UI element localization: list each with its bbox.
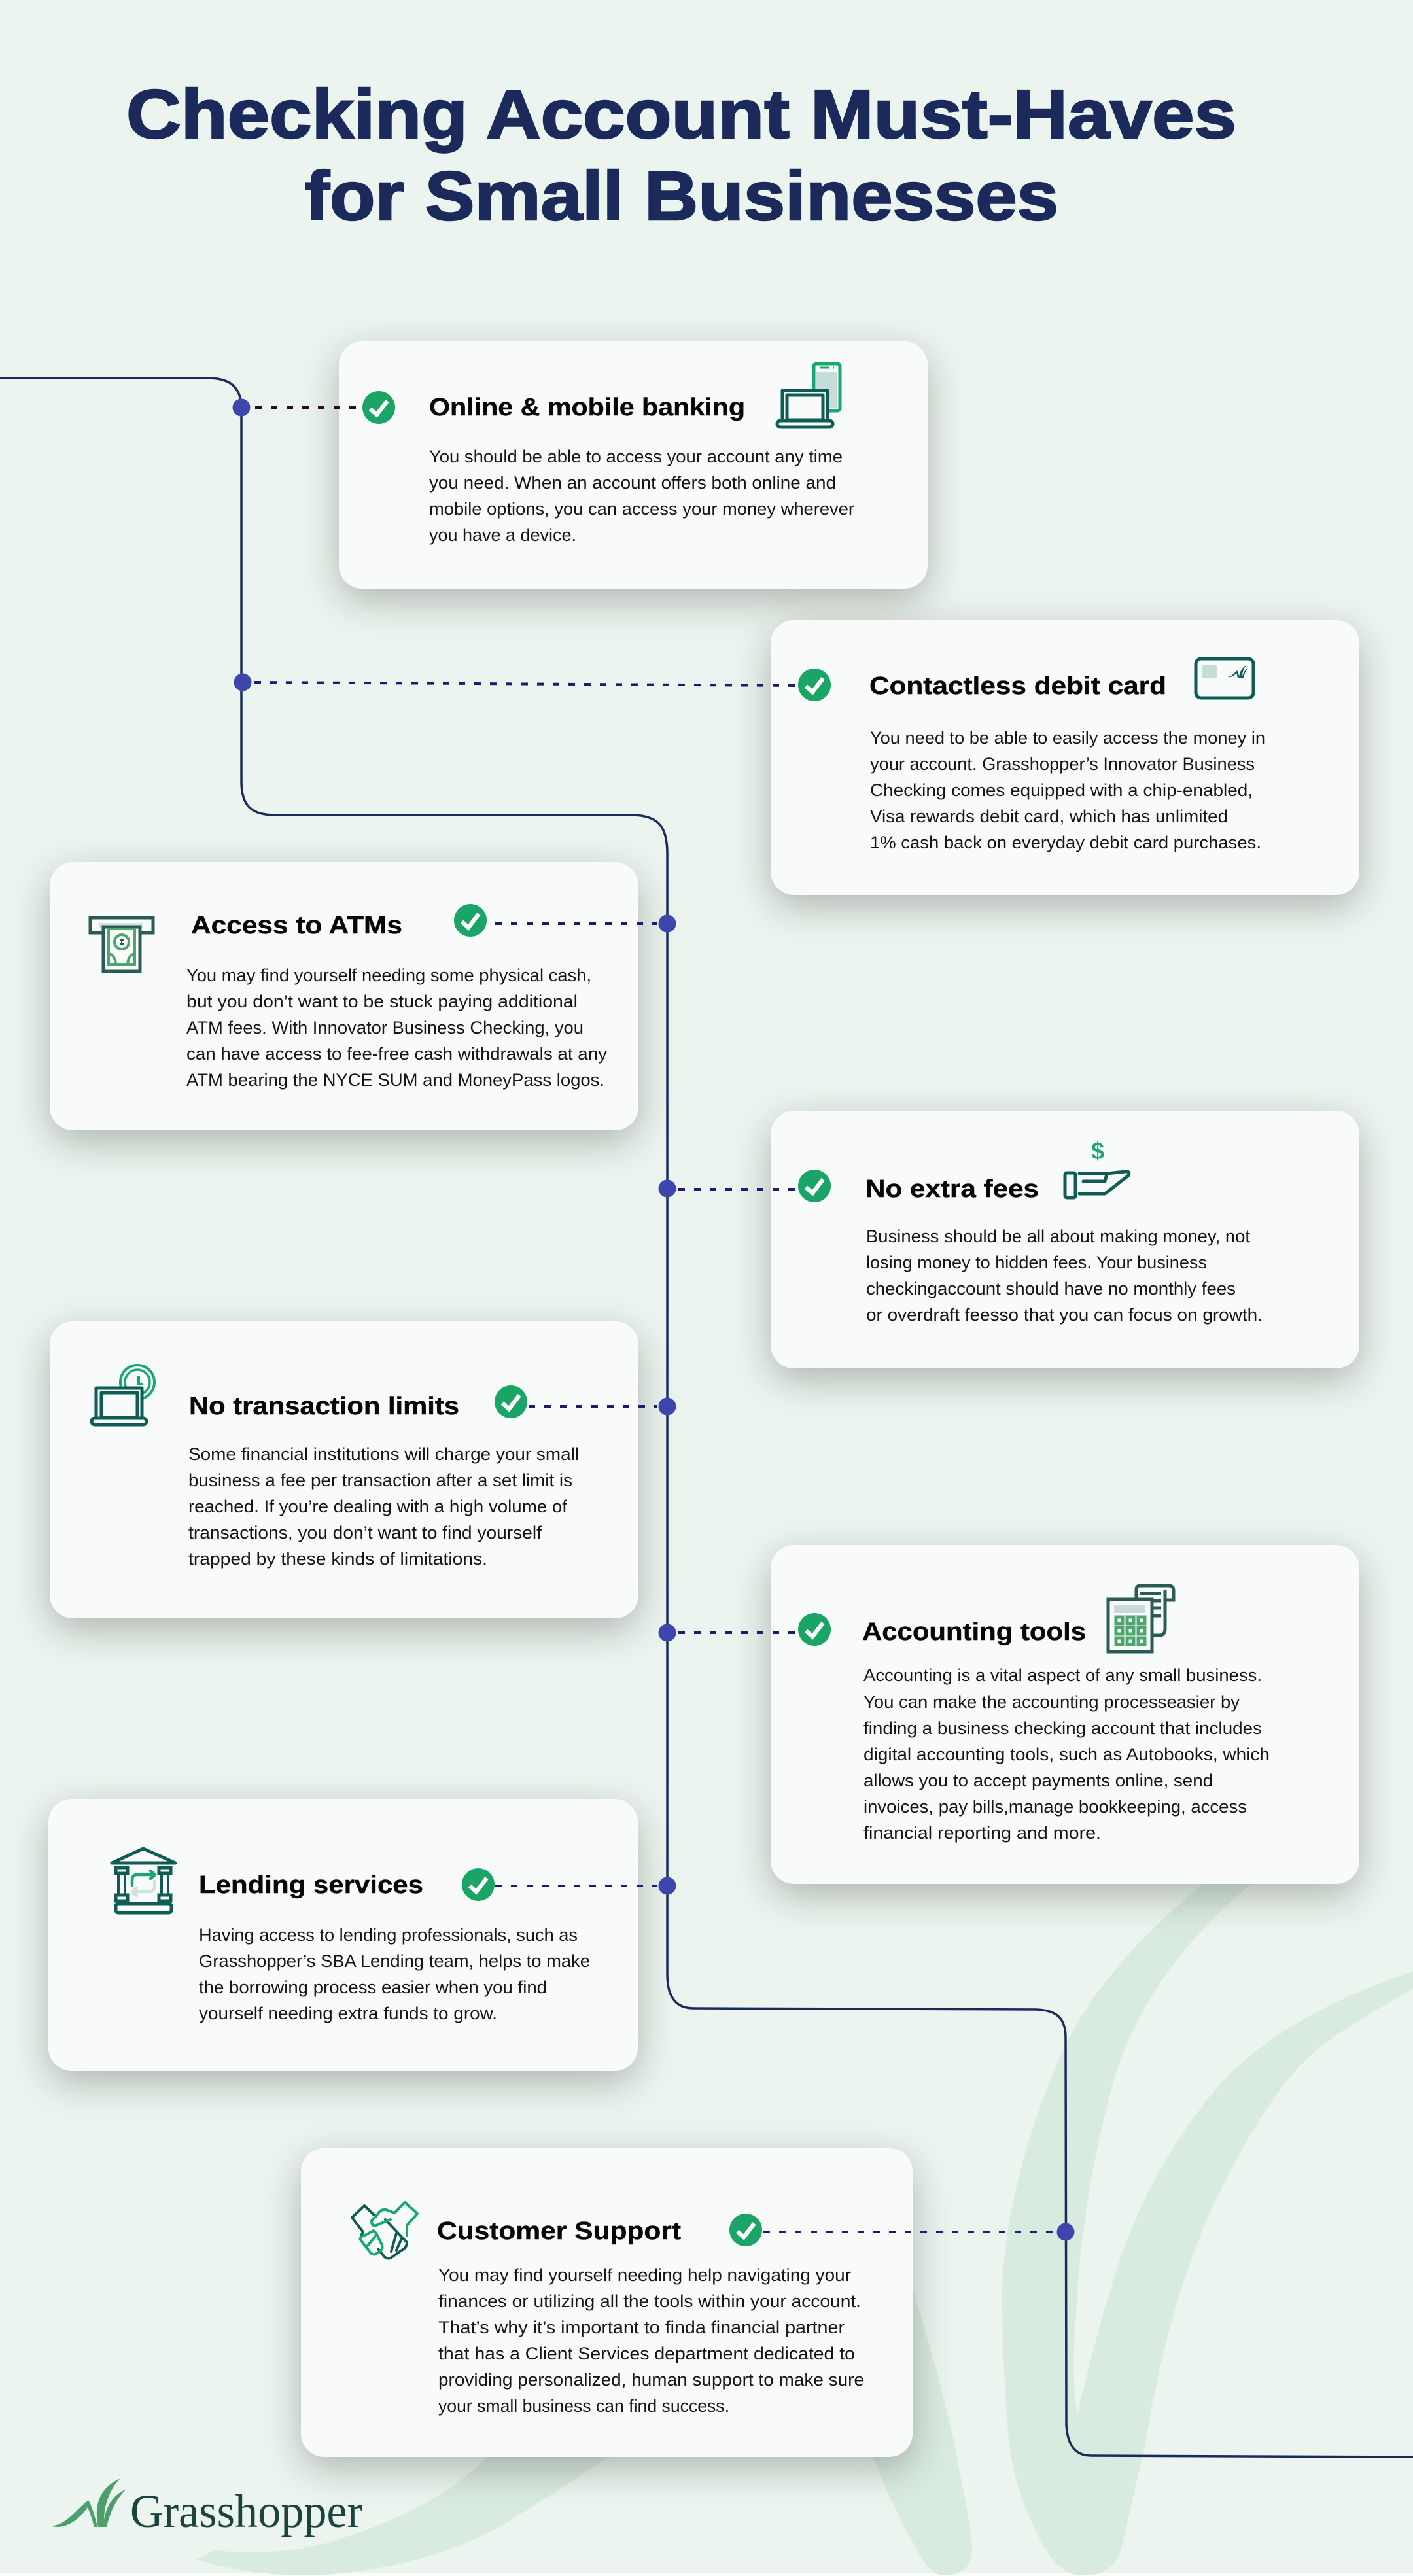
panel: lending services (48, 1799, 638, 2071)
body text: you have a device. (429, 525, 576, 545)
title: Checking Account Must-Haves (126, 76, 1236, 153)
card background (339, 341, 928, 589)
body text: or overdraft feesso that you can focus on growth. (866, 1305, 1263, 1325)
body text: financial reporting and more. (864, 1823, 1101, 1843)
body text: but you don’t want to be stuck paying additional (186, 992, 578, 1011)
body text: transactions, you don’t want to find yourself (188, 1523, 542, 1542)
heading: Access to ATMs (191, 912, 402, 939)
icon: bank building (112, 1849, 175, 1913)
body text (866, 1227, 1263, 1325)
body text: Grasshopper’s SBA Lending team, helps to make (199, 1951, 590, 1971)
check badge (729, 2214, 762, 2246)
panel: contactless debit card (771, 620, 1359, 895)
body text: trapped by these kinds of limitations. (188, 1549, 487, 1569)
icon: hand with dollar (1065, 1138, 1129, 1198)
body text: allows you to accept payments online, send (864, 1771, 1213, 1790)
heading: Accounting tools (862, 1618, 1086, 1646)
body text (188, 1444, 579, 1569)
body text: yourself needing extra funds to grow. (199, 2004, 497, 2023)
panel: access to ATMs (50, 862, 638, 1130)
panel: accounting tools (771, 1545, 1359, 1884)
body text (429, 447, 854, 545)
body text: mobile options, you can access your money wherever (429, 499, 854, 519)
body text: providing personalized, human support to make sure (438, 2370, 864, 2390)
body text: digital accounting tools, such as Autobooks, which (864, 1745, 1270, 1764)
body text: You can make the accounting processeasier by (864, 1692, 1240, 1712)
card background (771, 620, 1359, 895)
panel: no transaction limits (50, 1321, 638, 1618)
body text: Checking comes equipped with a chip-enabled, (870, 780, 1253, 800)
panel: online and mobile banking (339, 341, 928, 589)
check badge (462, 1868, 495, 1901)
body text: ATM fees. With Innovator Business Checking, you (186, 1018, 584, 1037)
check badge (362, 391, 395, 424)
icon: grass mark (49, 2479, 126, 2527)
body text: Visa rewards debit card, which has unlimited (870, 807, 1228, 826)
body text: 1% cash back on everyday debit card purchases. (870, 833, 1261, 852)
icon: calculator and receipt (1108, 1586, 1174, 1652)
title (126, 76, 1236, 235)
panel: customer support (301, 2148, 913, 2457)
heading: Contactless debit card (869, 672, 1166, 700)
icon: phone and laptop (777, 364, 840, 427)
card background (50, 862, 638, 1130)
body text: finances or utilizing all the tools within your account. (438, 2291, 861, 2311)
timeline nodes (233, 399, 1074, 2241)
body text: losing money to hidden fees. Your business (866, 1253, 1207, 1272)
body text: the borrowing process easier when you find (199, 1977, 547, 1997)
card background (48, 1799, 638, 2071)
body text: Having access to lending professionals, such as (199, 1925, 578, 1945)
heading: No transaction limits (189, 1393, 459, 1420)
body text: invoices, pay bills,manage bookkeeping, access (864, 1797, 1247, 1817)
body text: Accounting is a vital aspect of any small business. (864, 1665, 1262, 1685)
card background (771, 1545, 1359, 1884)
body text: You need to be able to easily access the money in (870, 728, 1265, 748)
check badge (798, 1170, 831, 1202)
background grass blades (195, 1877, 1413, 2575)
icon: ATM cash (90, 918, 153, 971)
dashed connectors (254, 408, 1056, 2232)
icon: hand with dollar: $ (1091, 1138, 1104, 1164)
body text: ATM bearing the NYCE SUM and MoneyPass logos. (186, 1070, 604, 1090)
body text: you need. When an account offers both online and (429, 473, 836, 493)
check badge (454, 904, 487, 937)
icon: debit card (1196, 659, 1253, 698)
body text (864, 1665, 1270, 1843)
heading: Customer Support (437, 2218, 681, 2245)
body text: You may find yourself needing some physical cash, (186, 966, 591, 985)
body text: business a fee per transaction after a set limit is (188, 1471, 572, 1490)
check badge (495, 1385, 527, 1418)
body text: can have access to fee-free cash withdrawals at any (186, 1044, 608, 1064)
body text: Some financial institutions will charge your small (188, 1444, 579, 1464)
body text: checkingaccount should have no monthly fees (866, 1279, 1236, 1298)
body text (199, 1925, 590, 2023)
body text (870, 728, 1265, 852)
body text: reached. If you’re dealing with a high volume of (188, 1497, 568, 1516)
body text: your small business can find success. (438, 2396, 729, 2416)
card background (771, 1111, 1359, 1368)
icon: laptop and clock (92, 1365, 154, 1425)
card background (50, 1321, 638, 1618)
body text: finding a business checking account that includes (864, 1718, 1262, 1738)
heading: Online & mobile banking (429, 394, 745, 421)
panel: no extra fees (771, 1111, 1359, 1368)
body text: your account. Grasshopper’s Innovator Business (870, 754, 1255, 774)
icon: handshake (352, 2202, 417, 2258)
body text: that has a Client Services department dedicated to (438, 2344, 855, 2363)
check badge (798, 1613, 831, 1646)
title: for Small Businesses (305, 158, 1058, 235)
body text: You may find yourself needing help navigating your (438, 2265, 851, 2285)
heading: No extra fees (865, 1175, 1039, 1203)
body text (438, 2265, 864, 2416)
card background (301, 2148, 913, 2457)
body text: You should be able to access your account any time (429, 447, 843, 466)
heading: Lending services (199, 1871, 423, 1899)
body text (186, 966, 608, 1090)
check badge (798, 669, 831, 701)
body text: Business should be all about making money, not (866, 1227, 1250, 1246)
wordmark: Grasshopper (130, 2485, 362, 2537)
logo: Grasshopper (49, 2479, 362, 2537)
body text: That’s why it’s important to finda financial partner (438, 2318, 845, 2337)
